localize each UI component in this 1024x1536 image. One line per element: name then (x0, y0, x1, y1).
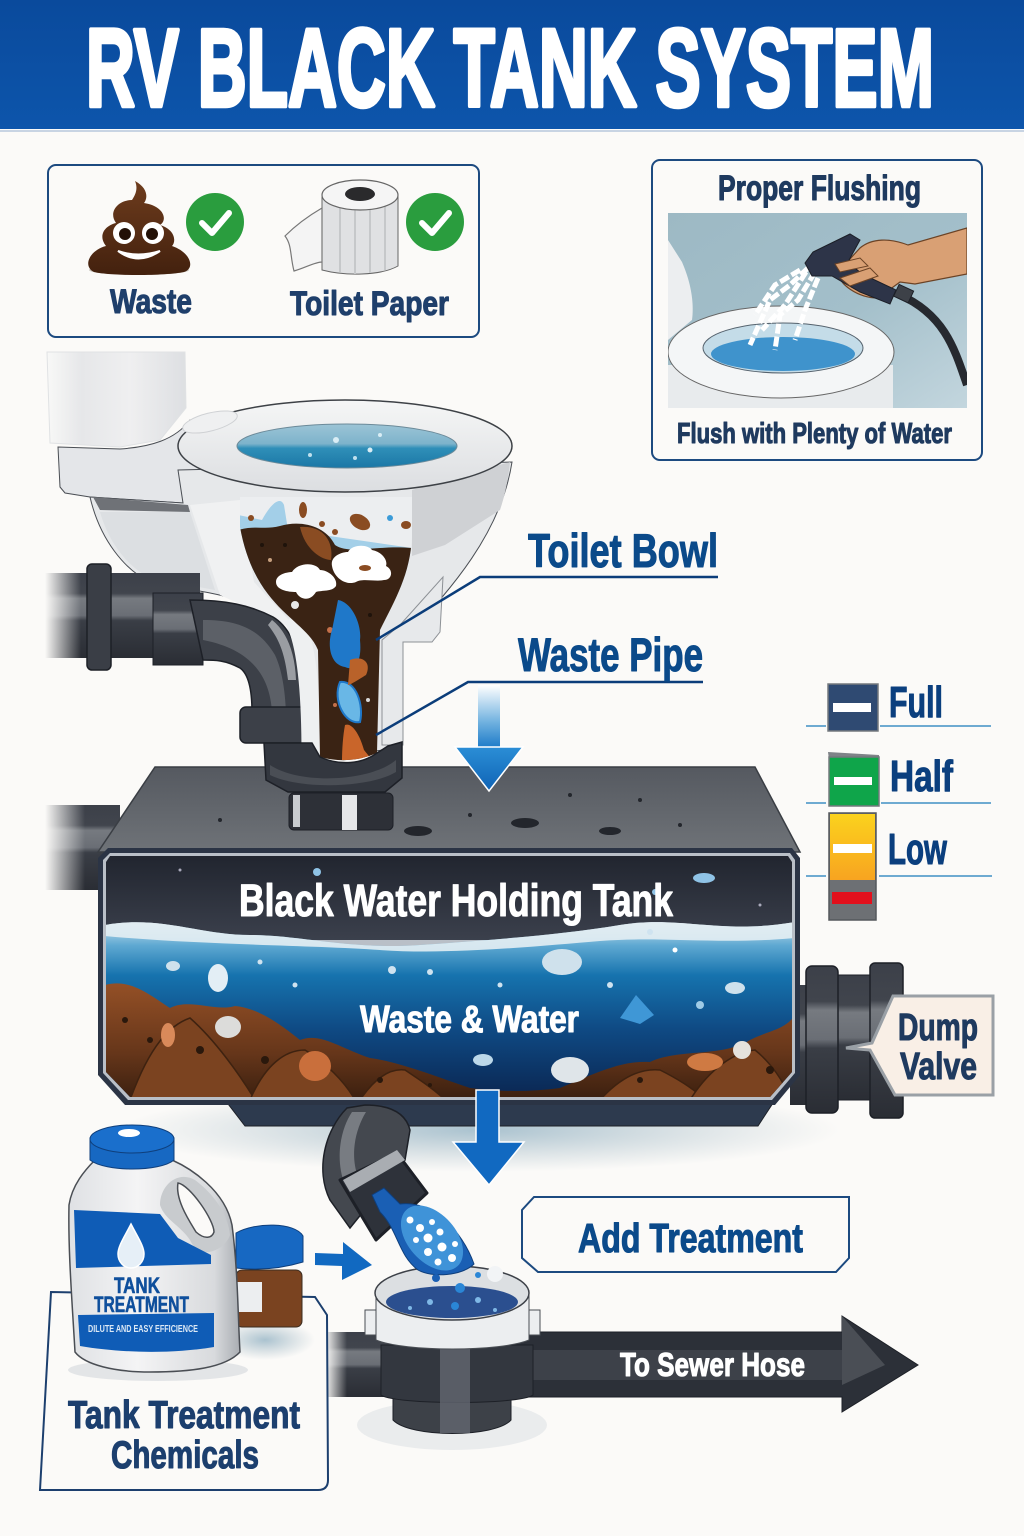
icon: check for waste (186, 193, 244, 251)
gauge: half (828, 752, 953, 806)
lower pipe coupling (264, 742, 402, 830)
icon: toilet paper (285, 180, 398, 274)
icon: water drop (118, 1224, 144, 1268)
bottle of treatment (68, 1125, 248, 1381)
bottle label: tank treatment: TREATMENT (94, 1292, 189, 1317)
bottle label: tank treatment: TANK (114, 1273, 160, 1298)
header banner (0, 0, 1024, 131)
callout: add treatment (522, 1197, 849, 1272)
bowl water (237, 424, 457, 468)
toilet shelf (58, 420, 250, 503)
panel: what goes in the tank (48, 165, 479, 337)
heading: proper flushing: Proper Flushing (718, 169, 921, 208)
bottle fine print: DILUTE AND EASY EFFICIENCE (88, 1324, 198, 1335)
scoop of treatment granules (372, 1188, 503, 1293)
icon: check for toilet paper (406, 193, 464, 251)
icon: waste (88, 181, 190, 275)
gauge: low (829, 813, 948, 920)
jar of treatment (215, 1225, 315, 1360)
tank title: Black Water Holding Tank (239, 875, 674, 926)
flushing illustration (668, 213, 967, 408)
tank underside skirt (120, 1088, 840, 1172)
black water holding tank (98, 848, 800, 1105)
panel: tank treatment chemicals (40, 1292, 328, 1490)
callout: dump valve: Valve (900, 1046, 977, 1088)
label: to sewer hose: To Sewer Hose (620, 1346, 805, 1383)
arrow: down to treatment (453, 1090, 524, 1185)
callout: add treatment: Add Treatment (578, 1215, 803, 1261)
gauge: full: Full (889, 678, 943, 727)
heading: tank treatment chemicals (68, 1394, 300, 1477)
horizontal pipe (45, 564, 203, 670)
pipe elbow (190, 600, 307, 717)
handle area (160, 1177, 230, 1252)
label: toilet paper: Toilet Paper (290, 285, 449, 323)
label: waste pipe: Waste Pipe (518, 628, 703, 681)
left tank pipe (45, 805, 120, 890)
gauge: full (828, 678, 943, 731)
gauge: half: Half (890, 752, 953, 801)
bottle cap (90, 1125, 174, 1169)
bowl shading (93, 462, 510, 632)
callout: dump valve: Dump (898, 1007, 978, 1049)
gauge: low: Low (888, 825, 948, 874)
toilet bowl body (90, 462, 512, 757)
panel: proper flushing (652, 160, 982, 460)
tank contents label: Waste & Water (360, 999, 579, 1041)
toilet cutaway (45, 352, 512, 770)
heading: tank treatment chemicals: Tank Treatment (68, 1394, 300, 1437)
label: toilet bowl: Toilet Bowl (528, 524, 718, 577)
handle opening (178, 1183, 214, 1237)
heading: tank treatment chemicals: Chemicals (111, 1434, 259, 1477)
elbow from tank to valve (323, 1105, 427, 1240)
bottle label bottom band (78, 1313, 214, 1352)
cutaway: waste in toilet (240, 501, 411, 760)
right dump valve pipe (790, 963, 903, 1118)
label: waste pipe (376, 628, 703, 735)
tank top face (98, 767, 800, 852)
label: waste: Waste (110, 283, 192, 321)
arrow: into tank (455, 685, 523, 791)
white ceramic wall (292, 617, 311, 755)
treatment receiver (357, 1266, 547, 1450)
toilet seat (178, 400, 512, 492)
tank level gauge (806, 678, 992, 920)
bottle label: tank treatment (94, 1273, 189, 1317)
small arrow to treatment (315, 1242, 372, 1280)
sewer pipe with arrow (325, 1316, 918, 1412)
pipe clamp (240, 707, 310, 743)
toilet tank (47, 352, 186, 447)
label: toilet bowl (376, 524, 718, 640)
bottle label top band (74, 1210, 211, 1268)
callout: dump valve (846, 996, 993, 1095)
rear bracket (382, 577, 443, 745)
